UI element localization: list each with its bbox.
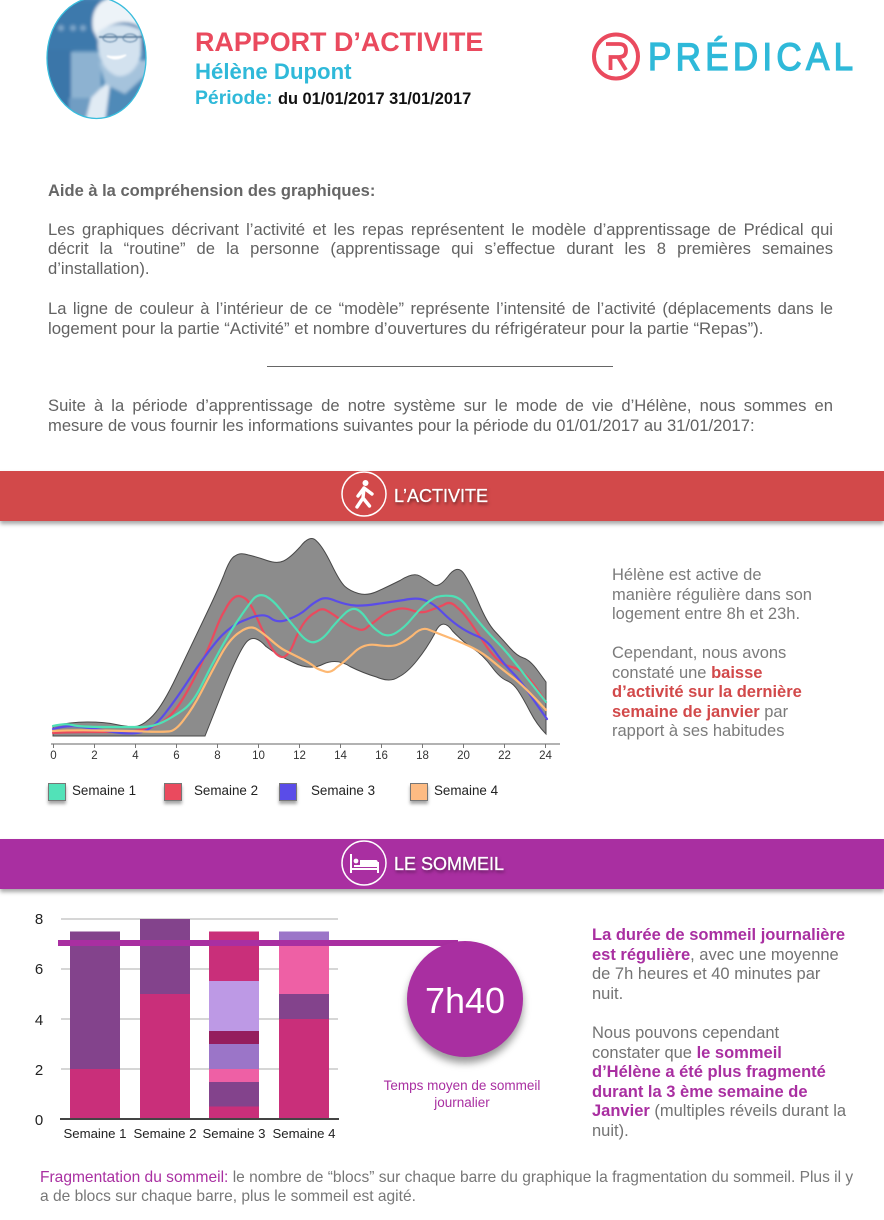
average circle: 7h40 [425, 980, 505, 1021]
sleep text: est régulière, avec une moyenne [592, 946, 839, 964]
x axis labels: Semaine 4 [272, 1126, 336, 1141]
sleep text: de 7h heures et 40 minutes par [592, 965, 820, 983]
banner heading: LE SOMMEIL [394, 854, 504, 874]
activity text: rapport à ses habitudes [612, 722, 784, 740]
x axis labels: Semaine 3 [202, 1126, 266, 1141]
y axis labels [35, 911, 43, 1129]
legend: Semaine 2 [194, 783, 258, 798]
sleep text: constater que le sommeil [592, 1044, 782, 1062]
footnote [40, 1169, 854, 1205]
average caption [384, 1078, 540, 1110]
footnote: Fragmentation du sommeil: le nombre de “blocs” sur chaque barre du graphique la fragmentation du sommeil. Plus il y [40, 1169, 853, 1186]
chart: activity [50, 538, 560, 762]
sleep text: Janvier (multiples réveils durant la [592, 1102, 846, 1120]
banner: activity [0, 471, 884, 521]
x axis: 24 [539, 750, 552, 762]
activity text: logement entre 8h et 23h. [612, 605, 800, 623]
x axis: 16 [375, 750, 388, 762]
y axis labels: 8 [35, 911, 43, 928]
icon: bed [341, 840, 387, 886]
person name: Hélène Dupont [195, 59, 352, 84]
activity text: Cependant, nous avons [612, 644, 786, 662]
bar: week 4 [279, 932, 329, 1119]
x axis: 2 [91, 750, 98, 762]
bar: week 1 [70, 932, 120, 1119]
intro text: mesure de vous fournir les informations suivantes pour la période du 01/01/2017 au 31/01/2017: [48, 416, 755, 435]
help text: La ligne de couleur à l’intérieur de ce “modèle” représente l’intensité de l’activité (déplacements dans le [48, 299, 833, 318]
help text: d’installation). [48, 259, 149, 278]
portrait photo [46, 0, 147, 120]
banner: sleep [0, 839, 884, 889]
intro text [48, 396, 833, 435]
legend [46, 783, 498, 806]
average caption: journalier [434, 1095, 490, 1110]
x axis: 18 [416, 750, 429, 762]
y axis labels: 6 [35, 961, 43, 978]
average caption: Temps moyen de sommeil [384, 1078, 540, 1093]
activity text [612, 566, 812, 740]
help text: décrit la “routine” de la personne (apprentissage qui s’effectue durant les 8 premières semaines [48, 239, 833, 258]
sleep text: nuit. [592, 985, 623, 1003]
x axis: 0 [50, 750, 57, 762]
x axis: 6 [173, 750, 180, 762]
logo: PRÉDICAL [648, 34, 857, 78]
bar: week 3 [209, 932, 259, 1119]
help text: Les graphiques décrivant l’activité et les repas représentent le modèle d’apprentissage de Prédical qui [48, 220, 833, 239]
activity text: Hélène est active de [612, 566, 762, 584]
x axis: 20 [457, 750, 470, 762]
line: week 3 [53, 598, 547, 733]
average circle [407, 941, 523, 1057]
period: Période: du 01/01/2017 31/01/2017 [195, 87, 471, 109]
x axis: 8 [214, 750, 221, 762]
x axis labels: Semaine 2 [133, 1126, 197, 1141]
x axis: 12 [293, 750, 306, 762]
sleep text: durant la 3 ème semaine de [592, 1083, 808, 1101]
x axis: 22 [498, 750, 511, 762]
help text [48, 220, 833, 338]
legend: Semaine 1 [72, 783, 136, 798]
x axis: 4 [132, 750, 139, 762]
x axis [50, 744, 560, 762]
activity text: d’activité sur la dernière [612, 683, 802, 701]
x axis labels: Semaine 1 [63, 1126, 127, 1141]
y axis labels: 4 [35, 1012, 43, 1029]
y axis labels: 2 [35, 1062, 43, 1079]
intro text: Suite à la période d’apprentissage de notre système sur le mode de vie d’Hélène, nous sommes en [48, 396, 833, 415]
activity text: manière régulière dans son [612, 586, 812, 604]
x axis: 14 [334, 750, 347, 762]
icon: walking person [341, 471, 387, 517]
x axis labels [63, 1126, 336, 1141]
x axis: 10 [252, 750, 265, 762]
y axis labels: 0 [35, 1112, 43, 1129]
chart: sleep bars [35, 911, 339, 1141]
title: RAPPORT D’ACTIVITE [195, 27, 483, 57]
footnote: a de blocs sur chaque barre, plus le sommeil est agité. [40, 1188, 416, 1205]
bar: week 2 [140, 919, 190, 1119]
activity text: semaine de janvier par [612, 702, 788, 720]
legend: Semaine 4 [434, 783, 498, 798]
banner heading: L’ACTIVITE [394, 486, 488, 506]
sleep text: d’Hélène a été plus fragmenté [592, 1063, 826, 1081]
sleep text: nuit). [592, 1122, 629, 1140]
sleep text [592, 926, 846, 1140]
help heading: Aide à la compréhension des graphiques: [48, 182, 375, 200]
sleep text: La durée de sommeil journalière [592, 926, 845, 944]
legend: Semaine 3 [311, 783, 375, 798]
line: week 2 [53, 596, 546, 733]
line: week 1 [53, 595, 546, 727]
activity text: constaté une baisse [612, 664, 762, 682]
average line [58, 940, 458, 946]
band: model [53, 539, 546, 736]
line: week 4 [53, 628, 546, 732]
sleep text: Nous pouvons cependant [592, 1024, 779, 1042]
help text: logement pour la partie “Activité” et nombre d’ouvertures du réfrigérateur pour la partie “Repas”). [48, 319, 763, 338]
